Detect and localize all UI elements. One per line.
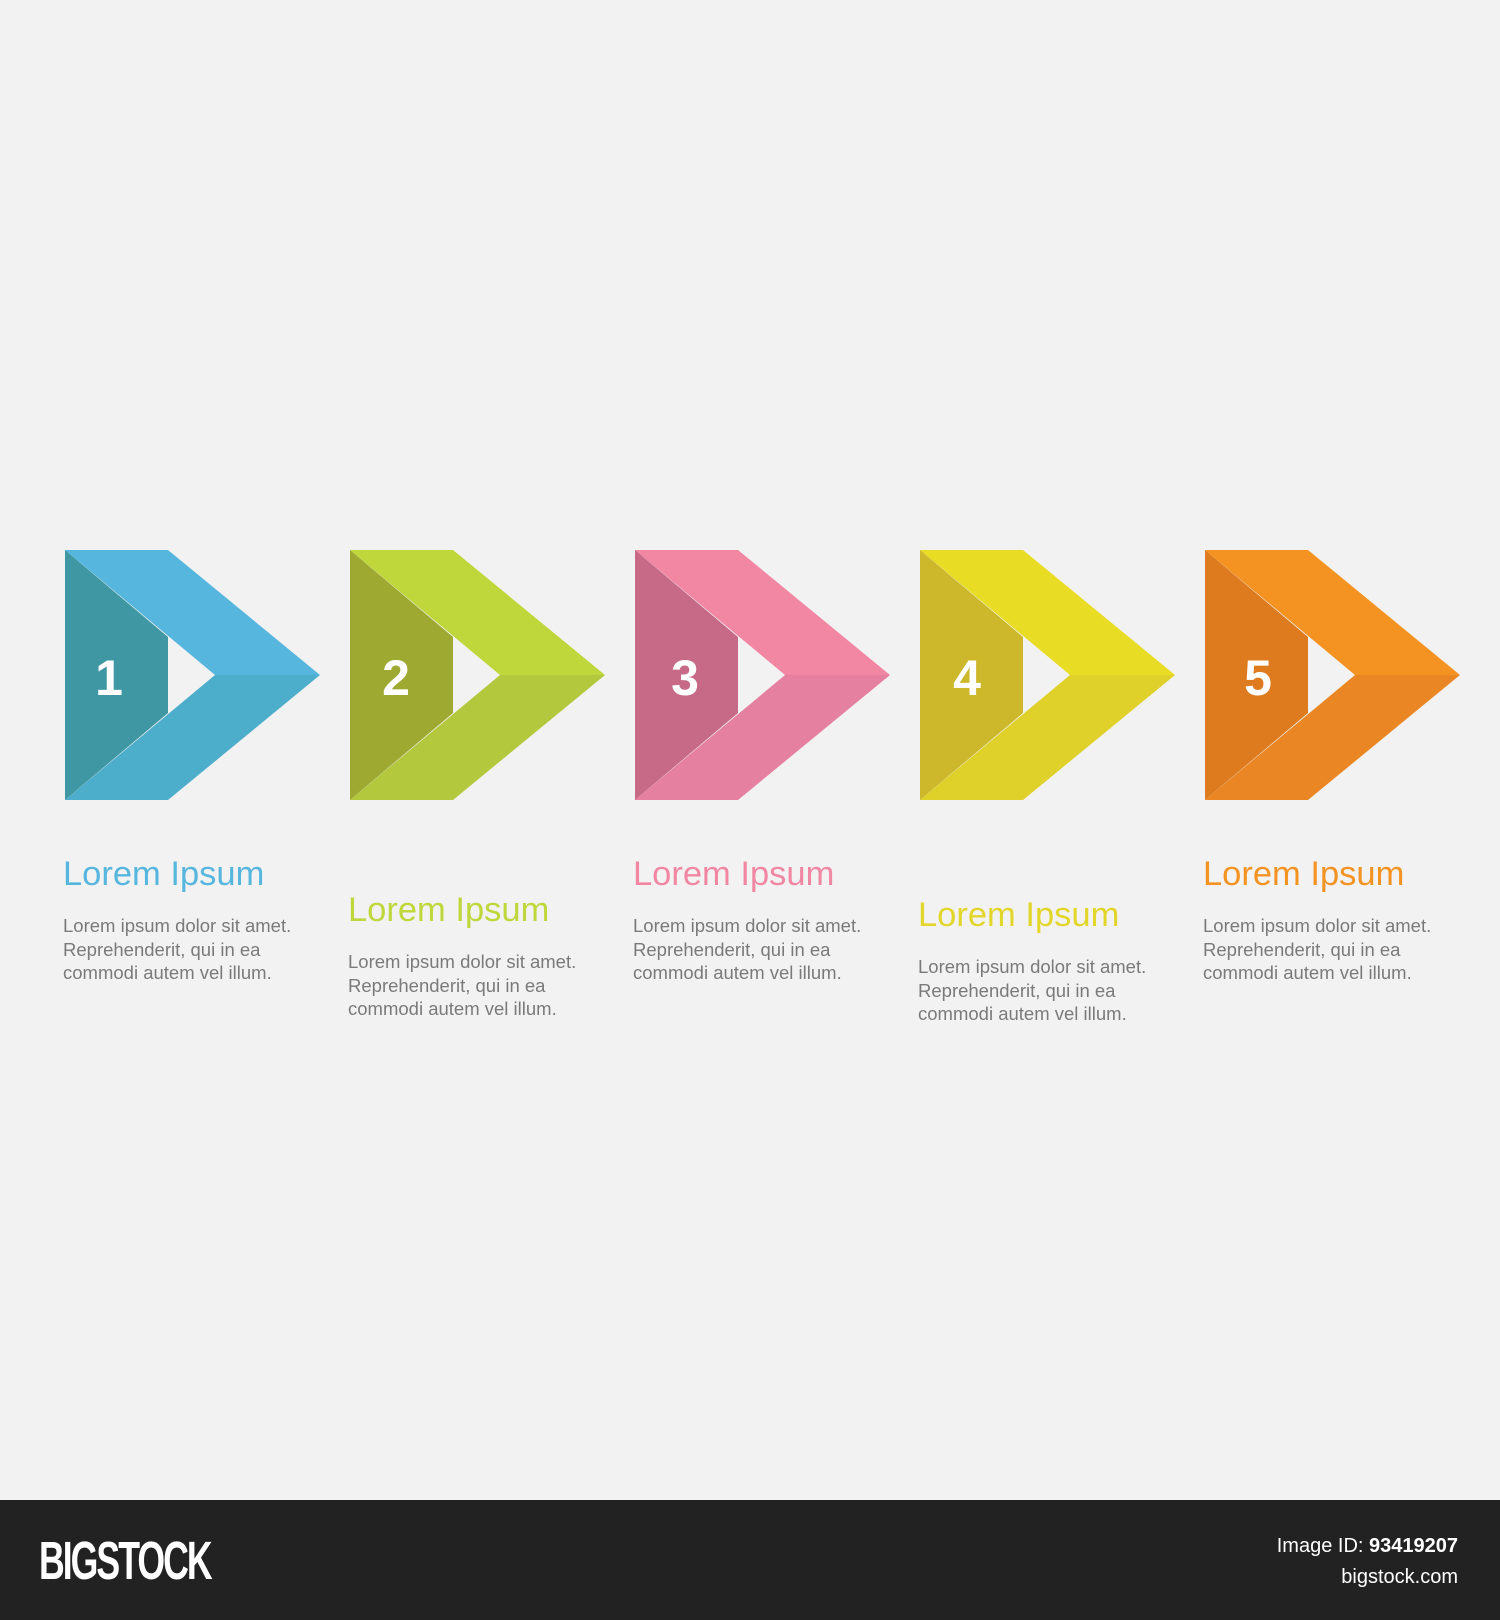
footer bar — [0, 1500, 1500, 1620]
footer logo: BIGSTOCK — [39, 1531, 211, 1591]
arrow 5 — [1205, 550, 1460, 800]
body 3: Reprehenderit, qui in ea — [633, 938, 830, 960]
arrow 1: 1 — [95, 650, 123, 706]
footer image id: bigstock.com — [1341, 1566, 1458, 1588]
body 4: Reprehenderit, qui in ea — [918, 980, 1115, 1000]
body 2: Reprehenderit, qui in ea — [348, 974, 545, 996]
body 5: commodi autem vel illum. — [1203, 962, 1412, 983]
body 5: Reprehenderit, qui in ea — [1203, 938, 1400, 960]
body 2: Lorem ipsum dolor sit amet. — [348, 951, 576, 972]
arrow 2 — [350, 550, 605, 800]
footer image id — [1277, 1535, 1458, 1588]
step 3 text — [633, 855, 861, 983]
title 4: Lorem Ipsum — [918, 896, 1119, 934]
arrow 1 — [65, 550, 320, 800]
arrow 2: 2 — [382, 650, 410, 706]
title 5: Lorem Ipsum — [1203, 855, 1404, 893]
title 3: Lorem Ipsum — [633, 855, 834, 893]
body 4: commodi autem vel illum. — [918, 1003, 1127, 1024]
body 5: Lorem ipsum dolor sit amet. — [1203, 915, 1431, 936]
body 2: commodi autem vel illum. — [348, 998, 557, 1019]
body 4: Lorem ipsum dolor sit amet. — [918, 956, 1146, 977]
step 4 text — [918, 896, 1146, 1024]
body 3: Lorem ipsum dolor sit amet. — [633, 915, 861, 936]
body 4 — [918, 956, 1146, 1024]
arrow 4 — [920, 550, 1175, 800]
body 2 — [348, 951, 576, 1019]
body 1 — [63, 915, 291, 983]
arrow 3: 3 — [671, 650, 699, 706]
step 2 text — [348, 891, 576, 1019]
body 1: commodi autem vel illum. — [63, 962, 272, 983]
arrow 3 — [635, 550, 890, 800]
step 1 text — [63, 855, 291, 983]
arrow 5: 5 — [1244, 650, 1272, 706]
step 5 text — [1203, 855, 1431, 983]
body 3 — [633, 915, 861, 983]
footer image id: Image ID: 93419207 — [1277, 1535, 1458, 1557]
body 1: Reprehenderit, qui in ea — [63, 938, 260, 960]
body 3: commodi autem vel illum. — [633, 962, 842, 983]
arrow 4: 4 — [953, 650, 981, 706]
body 1: Lorem ipsum dolor sit amet. — [63, 915, 291, 936]
title 2: Lorem Ipsum — [348, 891, 549, 929]
title 1: Lorem Ipsum — [63, 855, 264, 893]
body 5 — [1203, 915, 1431, 983]
